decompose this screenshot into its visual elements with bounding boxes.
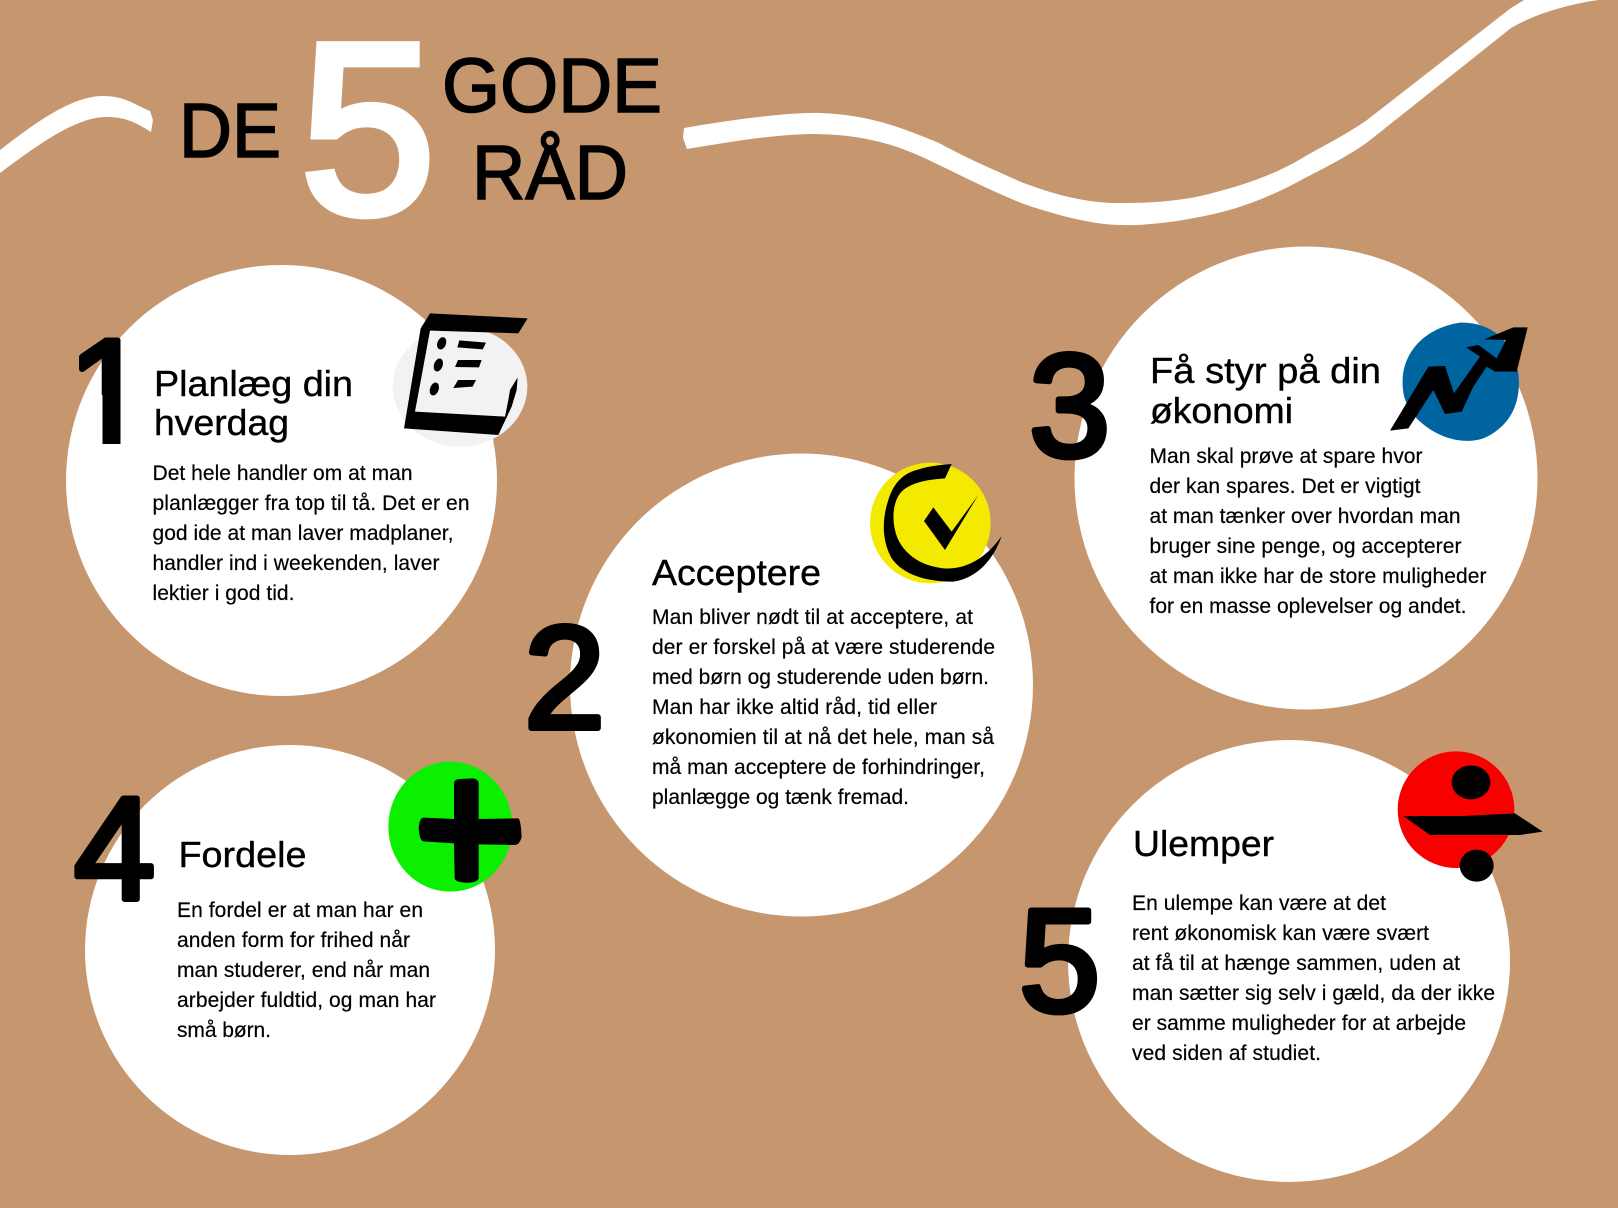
heading 3: Få styr på din	[1150, 350, 1381, 391]
text block 5: En ulempe kan være at det	[1132, 892, 1386, 915]
panel: 5 Ulemper	[1019, 740, 1543, 1182]
text block 5: at få til at hænge sammen, uden at	[1132, 952, 1460, 975]
text block 1: handler ind i weekenden, laver	[152, 552, 440, 575]
number 5: 5	[1019, 879, 1100, 1042]
text block 1: Det hele handler om at man	[152, 462, 412, 485]
heading 1: Planlæg din	[154, 363, 353, 404]
text block 2: må man acceptere de forhindringer,	[652, 756, 985, 779]
text block 3: for en masse oplevelser og andet.	[1150, 595, 1466, 618]
heading 4: Fordele	[178, 834, 306, 875]
heading 2: Acceptere	[652, 552, 821, 593]
title: RÅD	[472, 130, 628, 216]
icon: rising arrow	[1390, 323, 1528, 441]
text block 5: rent økonomisk kan være svært	[1132, 922, 1429, 945]
text block 2: Man har ikke altid råd, tid eller	[652, 696, 937, 719]
text block 2: med børn og studerende uden børn.	[652, 666, 989, 689]
text block 5: man sætter sig selv i gæld, da der ikke	[1132, 982, 1495, 1005]
title	[179, 0, 662, 265]
text block 4: En fordel er at man har en	[177, 899, 423, 922]
text block 3: der kan spares. Det er vigtigt	[1150, 475, 1421, 498]
title: 5	[300, 0, 436, 265]
text block 2: der er forskel på at være studerende	[652, 636, 995, 659]
title: DE	[179, 88, 281, 174]
icon: checklist	[393, 313, 528, 447]
icon: division sign	[1398, 751, 1543, 882]
number 4: 4	[74, 767, 155, 930]
text block 1: planlægger fra top til tå. Det er en	[152, 492, 470, 515]
text block 3: Man skal prøve at spare hvor	[1150, 445, 1422, 468]
text block 2: økonomien til at nå det hele, man så	[652, 726, 994, 749]
text block 3: at man tænker over hvordan man	[1150, 505, 1460, 528]
text block 2: Man bliver nødt til at acceptere, at	[652, 606, 973, 629]
text block 1: god ide at man laver madplaner,	[152, 522, 454, 545]
title: GODE	[442, 43, 662, 129]
text block 4: anden form for frihed når	[177, 929, 410, 952]
icon: check mark	[870, 463, 1002, 583]
number 3: 3	[1029, 324, 1110, 487]
number 2: 2	[524, 596, 605, 759]
text block 4: små børn.	[177, 1019, 271, 1042]
heading 1: hverdag	[154, 402, 289, 443]
panel: 4 Fordele	[74, 745, 522, 1155]
wave line left	[0, 96, 153, 173]
text block 2: planlægge og tænk fremad.	[652, 786, 909, 809]
text block 5: ved siden af studiet.	[1132, 1042, 1321, 1065]
number 1: 1	[68, 309, 149, 472]
text block 4: arbejder fuldtid, og man har	[177, 989, 436, 1012]
text block 4: man studerer, end når man	[177, 959, 430, 982]
panel: 1 Planlæg din hverdag	[66, 265, 528, 696]
icon: plus	[388, 762, 522, 892]
heading 3: økonomi	[1150, 390, 1293, 431]
text block 5: er samme muligheder for at arbejde	[1132, 1012, 1466, 1035]
panel: 2 Acceptere	[524, 454, 1033, 916]
text block 3: at man ikke har de store muligheder	[1150, 565, 1486, 588]
panel: 3 Få styr på din økonomi	[1029, 246, 1538, 710]
wave line right	[683, 0, 1598, 225]
text block 1: lektier i god tid.	[152, 582, 294, 605]
heading 5: Ulemper	[1133, 823, 1274, 864]
text block 3: bruger sine penge, og accepterer	[1150, 535, 1462, 558]
